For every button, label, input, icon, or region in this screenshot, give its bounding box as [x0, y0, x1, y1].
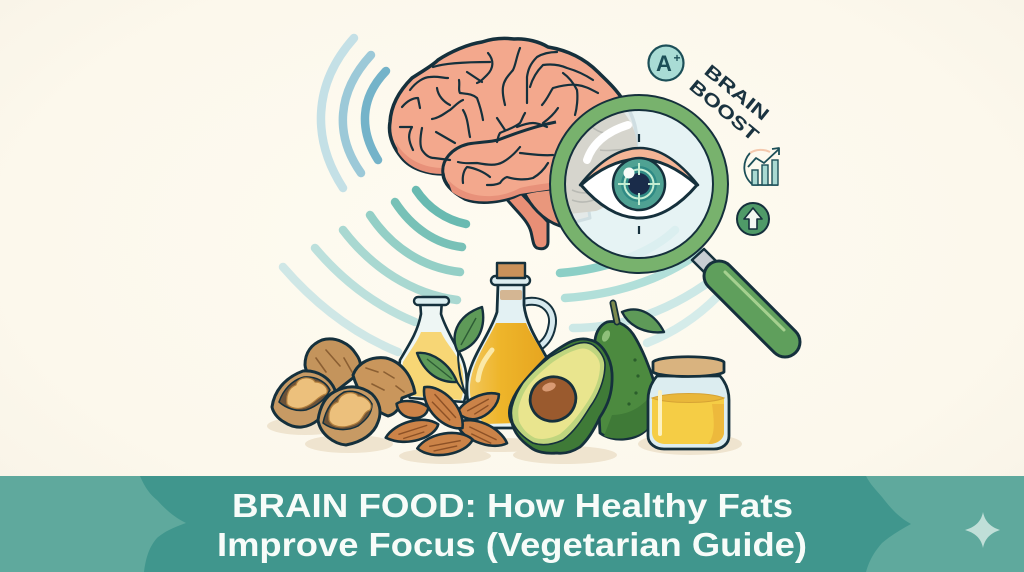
- avocado stem: [613, 303, 617, 322]
- walnut: back whole: [305, 339, 360, 392]
- icon: sparkle: [965, 512, 1000, 548]
- halved avocado: [509, 339, 612, 453]
- icon: up arrow badge: [737, 203, 769, 235]
- walnut: right whole: [353, 358, 415, 416]
- ground shadows: [267, 417, 742, 464]
- right wave arcs: [560, 230, 722, 343]
- almonds: [384, 379, 511, 457]
- handle grip: [719, 272, 785, 342]
- almond 4: [384, 416, 440, 446]
- walnut: front half: [318, 387, 380, 445]
- icon: A+ grade badge: +: [673, 51, 681, 65]
- walnuts: [272, 339, 415, 445]
- magnifying glass: [558, 100, 785, 342]
- whole avocado: [595, 303, 664, 439]
- bottle handle: [525, 301, 553, 349]
- herb leaves: [417, 307, 483, 395]
- temporal lobe outline: [443, 122, 556, 174]
- brain stem and cerebellum: [505, 185, 590, 249]
- walnut: left half: [272, 371, 335, 427]
- brain illustration: [390, 38, 637, 249]
- cork: [497, 263, 525, 278]
- lens glass: [563, 108, 715, 260]
- bottle body: [467, 284, 548, 428]
- almond 1: [395, 399, 429, 420]
- icon: A+ grade badge: [648, 46, 684, 80]
- oil: [470, 323, 546, 424]
- almond 2: [454, 390, 504, 423]
- almond 3: [416, 379, 471, 437]
- title banner: [0, 476, 1024, 572]
- title line 2: Improve Focus (Vegetarian Guide): [217, 526, 807, 563]
- label: Brain Boost: BOOST: [685, 76, 763, 145]
- large oil bottle: [467, 263, 553, 428]
- left sound-wave arcs: [321, 38, 386, 188]
- jar lid: [653, 357, 724, 376]
- jar of ghee: [648, 357, 729, 449]
- almond 6: [416, 431, 474, 457]
- lens glare: [587, 125, 628, 160]
- almond 5: [453, 415, 511, 451]
- cerebrum: [390, 38, 637, 202]
- brain folds: [400, 48, 598, 185]
- eye: [580, 134, 698, 234]
- small oil bottle: [399, 297, 467, 402]
- label: Brain Boost: [685, 61, 773, 145]
- avocado leaf: [622, 309, 664, 332]
- handle neck: [692, 249, 719, 276]
- ring: [558, 102, 720, 266]
- icon: growth chart: [744, 148, 779, 185]
- title line 1: BRAIN FOOD: How Healthy Fats: [232, 487, 793, 524]
- avocado pit: [523, 369, 583, 429]
- faded brain seen through lens: [566, 112, 638, 214]
- brain shading: [396, 142, 590, 201]
- label: Brain Boost: BRAIN: [700, 61, 773, 125]
- walnut wrinkles: [316, 350, 404, 392]
- banner ribbon: [140, 476, 911, 572]
- icon: A+ grade badge: A: [656, 51, 672, 76]
- bottle rim: [491, 276, 530, 285]
- lower-left teal wave arcs: [283, 190, 466, 352]
